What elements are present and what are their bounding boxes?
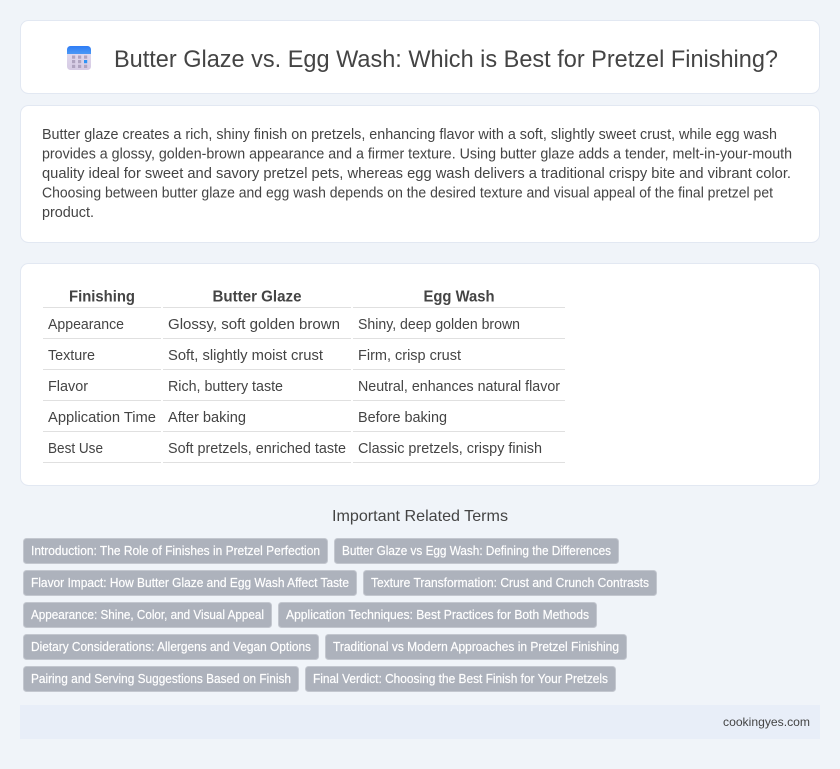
- chip: Pairing and Serving Suggestions Based on Finish: [31, 672, 291, 686]
- table header row: Butter Glaze: [212, 288, 302, 306]
- table header row: [69, 288, 494, 306]
- text block: summary: Butter glaze creates a rich, shiny finish on pretzels, enhancing flavor with a soft, slightly sweet crust, while egg wash: [42, 127, 777, 143]
- chip: [334, 538, 618, 564]
- table header row: Finishing: [69, 288, 135, 306]
- text block: summary: provides a glossy, golden-brown appearance and a firmer texture. Using butter glaze adds a tender, melt-in-your-mouth: [42, 146, 792, 162]
- row: flavor: Neutral, enhances natural flavor: [358, 379, 560, 395]
- chip: [364, 570, 656, 596]
- footer: cookingyes.com: [723, 715, 810, 729]
- chip: [326, 634, 626, 660]
- chip: Traditional vs Modern Approaches in Pretzel Finishing: [333, 640, 619, 654]
- table body: [48, 317, 560, 457]
- row: application time: After baking: [168, 410, 246, 426]
- row: appearance: Glossy, soft golden brown: [168, 317, 340, 333]
- table rules: [43, 307, 565, 463]
- row: texture: Firm, crisp crust: [358, 348, 461, 364]
- row: best use: [48, 441, 542, 457]
- row: application time: Application Time: [48, 410, 156, 426]
- chip: Introduction: The Role of Finishes in Pretzel Perfection: [31, 544, 320, 558]
- chip: Application Techniques: Best Practices for Both Methods: [286, 608, 589, 622]
- panel: comparison table: [20, 264, 820, 486]
- heading: important related terms: Important Related Terms: [332, 508, 508, 525]
- chip: [24, 666, 298, 692]
- chip: Final Verdict: Choosing the Best Finish for Your Pretzels: [313, 672, 608, 686]
- table header row: Egg Wash: [424, 288, 494, 306]
- row: appearance: Appearance: [48, 317, 124, 333]
- row: texture: [48, 348, 461, 364]
- chip: [24, 538, 328, 564]
- panel: title header: [20, 20, 820, 94]
- chip: [24, 634, 318, 660]
- row: appearance: [48, 317, 520, 333]
- row: texture: Texture: [48, 348, 95, 364]
- row: flavor: Rich, buttery taste: [168, 379, 283, 395]
- chip: [306, 666, 616, 692]
- row: best use: Best Use: [48, 441, 103, 457]
- chip: Appearance: Shine, Color, and Visual Appeal: [31, 608, 264, 622]
- chip: Dietary Considerations: Allergens and Vegan Options: [31, 640, 311, 654]
- row: texture: Soft, slightly moist crust: [168, 348, 323, 364]
- related terms chips: [24, 538, 656, 692]
- title: Butter Glaze vs. Egg Wash: Which is Best for Pretzel Finishing?: [114, 46, 778, 73]
- chip: Flavor Impact: How Butter Glaze and Egg Wash Affect Taste: [31, 576, 349, 590]
- row: flavor: Flavor: [48, 379, 88, 395]
- row: appearance: Shiny, deep golden brown: [358, 317, 520, 333]
- chip: Texture Transformation: Crust and Crunch Contrasts: [371, 576, 649, 590]
- text block: summary: product.: [42, 205, 94, 221]
- chip: [24, 570, 356, 596]
- row: best use: Classic pretzels, crispy finish: [358, 441, 542, 457]
- footer: [20, 705, 820, 739]
- chip: [24, 602, 272, 628]
- text block: summary: [42, 127, 792, 221]
- panel: summary paragraph: [20, 106, 820, 242]
- chip: Butter Glaze vs Egg Wash: Defining the Differences: [342, 544, 611, 558]
- row: flavor: [48, 379, 560, 395]
- row: application time: [48, 410, 447, 426]
- chip: [278, 602, 596, 628]
- row: application time: Before baking: [358, 410, 447, 426]
- text block: summary: Choosing between butter glaze and egg wash depends on the desired texture and visual appeal of the final pretzel pet: [42, 186, 773, 202]
- row: best use: Soft pretzels, enriched taste: [168, 441, 346, 457]
- text block: summary: quality ideal for sweet and savory pretzel pets, whereas egg wash delivers a traditional crispy bite and vibrant color.: [42, 166, 791, 182]
- icon: calendar: [67, 46, 91, 70]
